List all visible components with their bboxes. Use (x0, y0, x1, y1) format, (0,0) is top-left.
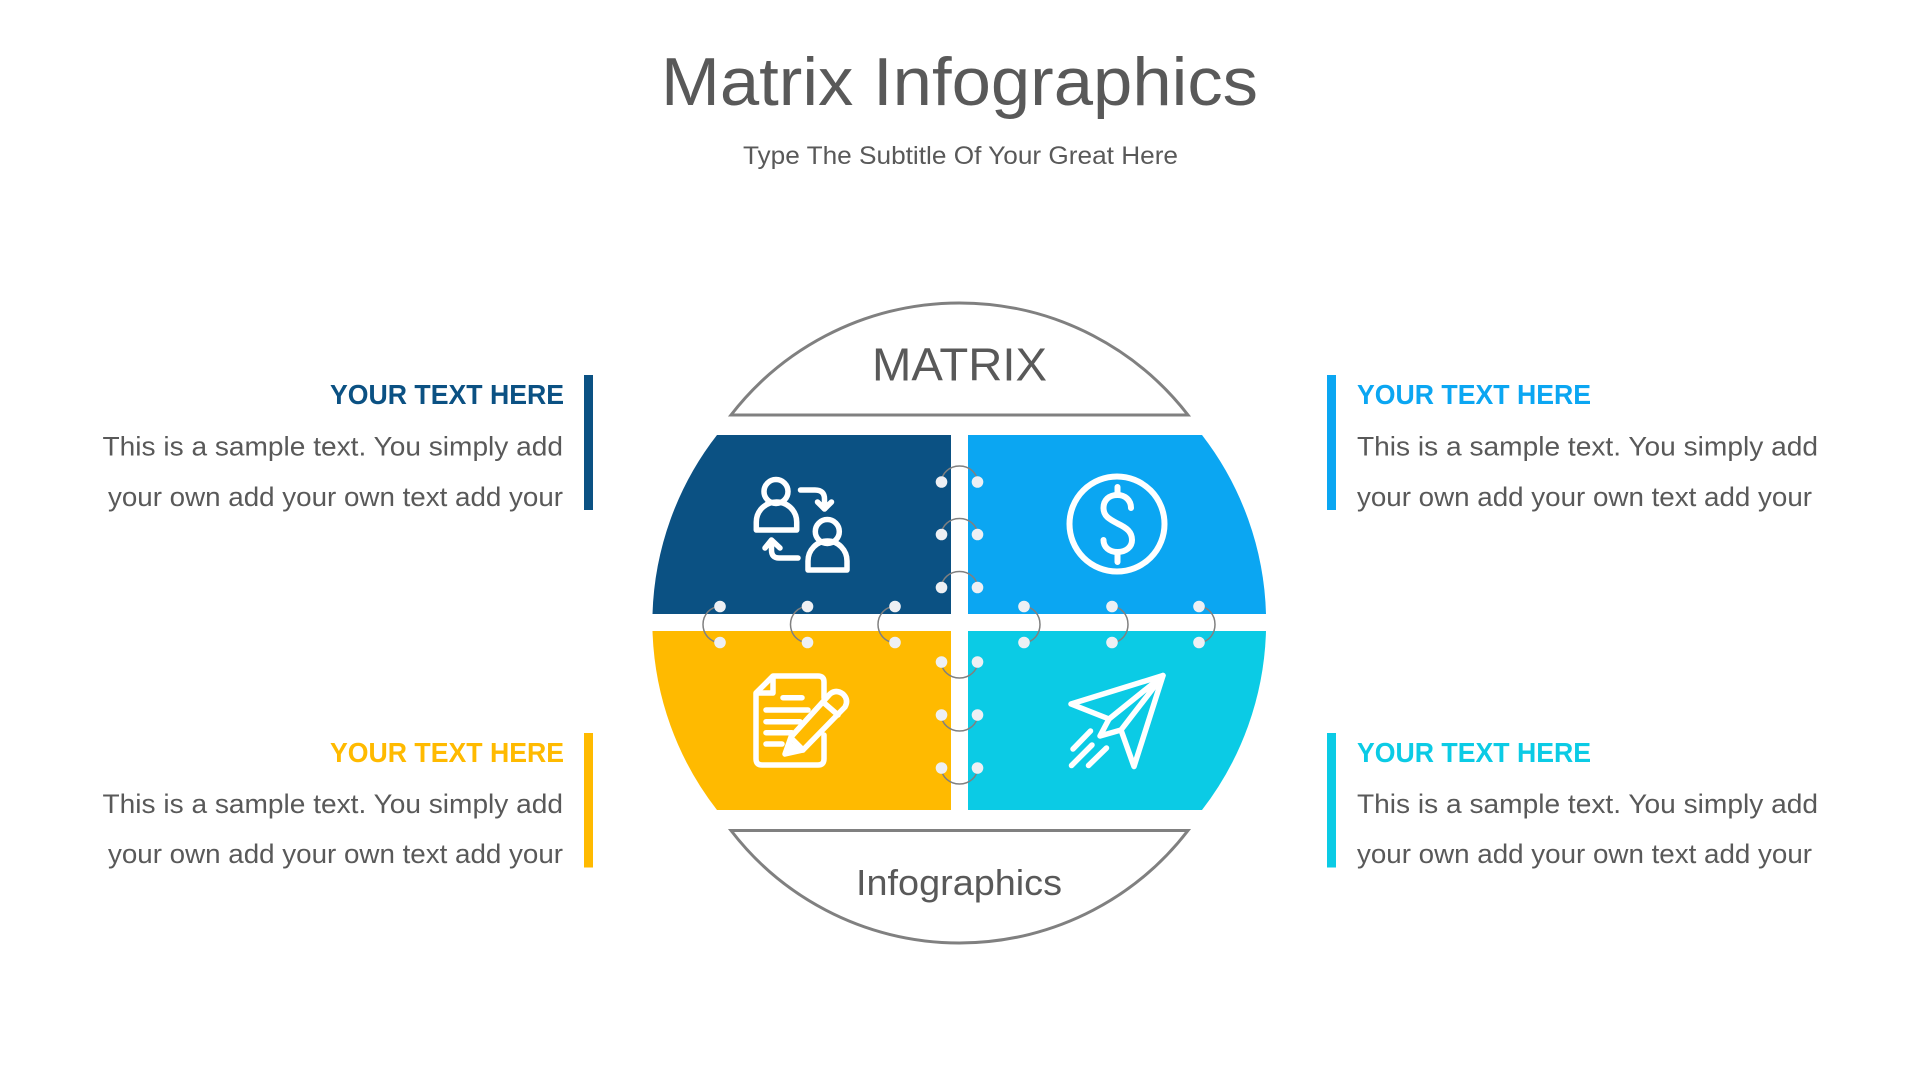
title: Matrix Infographics (661, 44, 1258, 120)
quadrant: cyan (968, 631, 1266, 810)
panel: top cap MATRIX (731, 303, 1188, 415)
body line 1: This is a sample text. You simply add (1357, 789, 1818, 819)
subtitle: Type The Subtitle Of Your Great Here (743, 142, 1178, 170)
binder rings between quadrants (703, 466, 1215, 784)
body line 2: your own add your own text add your (108, 839, 563, 869)
icon: dollar coin (1070, 476, 1164, 572)
heading: YOUR TEXT HERE (330, 379, 564, 410)
accent bar (584, 375, 593, 510)
icon: paper plane (1071, 676, 1163, 766)
body line 1: This is a sample text. You simply add (1357, 432, 1818, 462)
text block: top right (1327, 375, 1818, 512)
text block: bottom right (1327, 733, 1818, 869)
body line 2: your own add your own text add your (1357, 839, 1812, 869)
accent bar (584, 733, 593, 868)
body line 2: your own add your own text add your (108, 482, 563, 512)
cap label: MATRIX: MATRIX (872, 338, 1047, 390)
text block: bottom left (102, 733, 593, 869)
heading: YOUR TEXT HERE (330, 737, 564, 768)
icon: people exchange (756, 480, 847, 570)
accent bar (1327, 733, 1336, 868)
panel: bottom cap Infographics (731, 830, 1188, 943)
icon: document and pencil (756, 676, 847, 765)
quadrant: light blue (968, 435, 1266, 614)
quadrant: dark blue (652, 435, 951, 614)
heading: YOUR TEXT HERE (1357, 737, 1591, 768)
accent bar (1327, 375, 1336, 510)
text block: top left (102, 375, 593, 512)
body line 2: your own add your own text add your (1357, 482, 1812, 512)
body line 1: This is a sample text. You simply add (102, 432, 563, 462)
quadrant: yellow (652, 631, 951, 810)
cap label: Infographics: Infographics (856, 862, 1062, 903)
heading: YOUR TEXT HERE (1357, 379, 1591, 410)
body line 1: This is a sample text. You simply add (102, 789, 563, 819)
